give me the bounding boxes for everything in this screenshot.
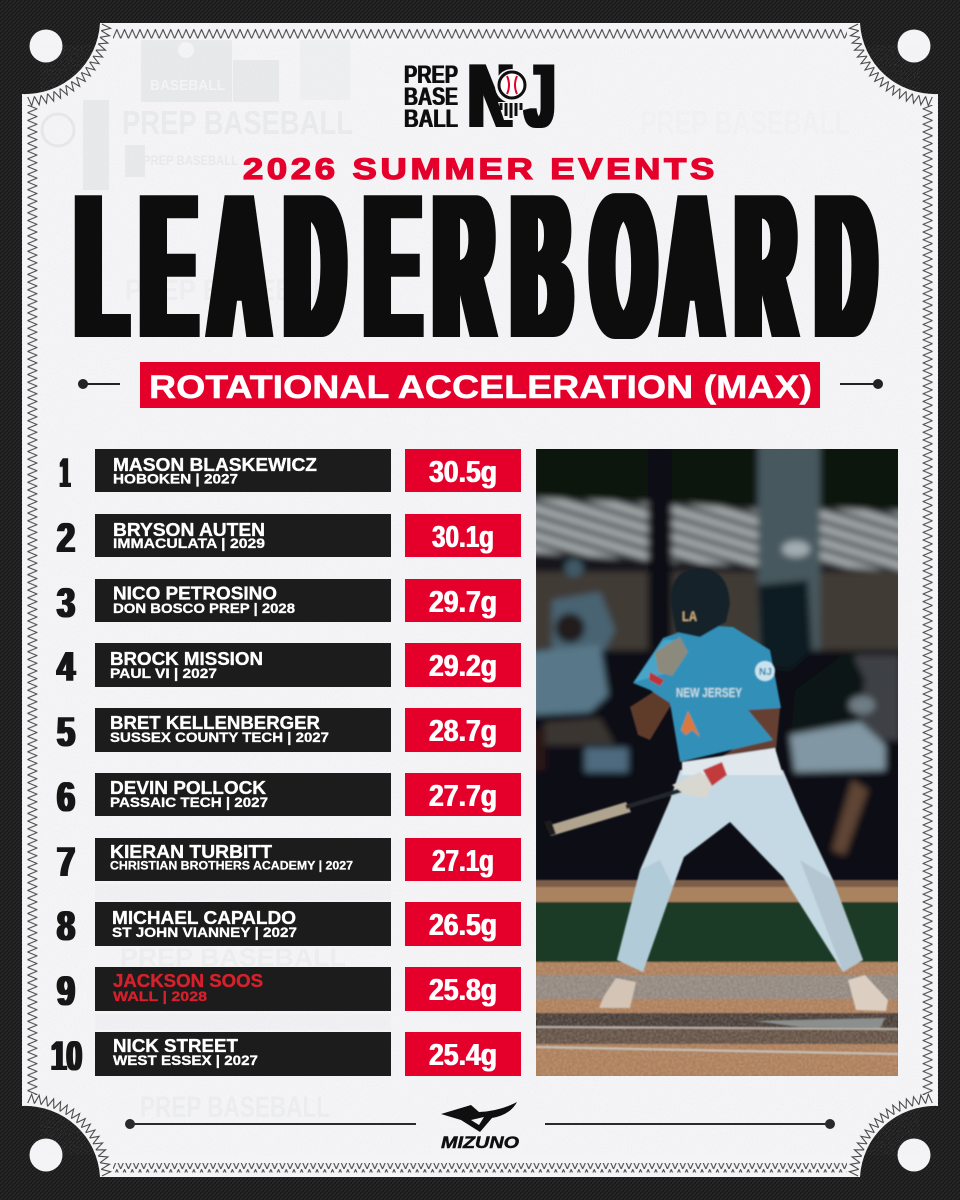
leaderboard rows: [51, 449, 521, 1079]
sponsor logo: Mizuno: [441, 1102, 519, 1152]
jersey lettering: NEW JERSEY: [676, 685, 742, 700]
row 4: BROCK MISSION: [110, 649, 263, 669]
row 8: MICHAEL CAPALDO: [112, 908, 296, 928]
spectators right: [758, 580, 812, 670]
row 10: WEST ESSEX | 2027: [113, 1052, 258, 1068]
footer lines: [126, 1120, 834, 1128]
banner: rotational acceleration: ROTATIONAL ACCELERATION (MAX): [149, 369, 812, 405]
row 6: [57, 773, 521, 820]
banner side ornaments: [78, 380, 882, 388]
row 6: 6: [57, 773, 75, 820]
row 2: IMMACULATA | 2029: [113, 535, 265, 551]
logo baseball and shield: [495, 69, 529, 120]
jersey NJ patch: [755, 661, 775, 681]
logo: Prep Baseball NJ: [404, 46, 555, 147]
row 7: 27.1g: [432, 843, 494, 878]
row 10: NICK STREET: [113, 1036, 238, 1056]
row 6: DEVIN POLLOCK: [110, 778, 266, 798]
row 3: DON BOSCO PREP | 2028: [113, 600, 295, 616]
row 10: 10: [51, 1032, 82, 1079]
row 8: ST JOHN VIANNEY | 2027: [112, 924, 297, 940]
row 9: 25.8g: [429, 972, 497, 1007]
spectators left: [552, 592, 615, 650]
row 9: 9: [57, 967, 75, 1014]
row 5: 28.7g: [429, 713, 497, 748]
jersey NJ patch: NJ: [759, 667, 772, 678]
logo wordmark: BASE: [404, 83, 458, 111]
row 4: 29.2g: [429, 648, 497, 683]
mizuno wordmark: MIZUNO: [441, 1133, 519, 1152]
batter helmet: LA: [682, 608, 697, 624]
row 8: 26.5g: [429, 907, 497, 942]
photo: batter at the plate: [530, 440, 905, 1090]
row 10: [51, 1032, 521, 1079]
batter figure: [544, 568, 888, 1011]
watermark pattern: PREP BASEBALL: [125, 274, 345, 307]
watermark pattern: PREP BASEBALL: [640, 104, 850, 141]
banner: rotational acceleration: [140, 362, 820, 408]
row 4: PAUL VI | 2027: [110, 665, 217, 681]
logo wordmark: [404, 61, 458, 133]
row 6: 27.7g: [429, 778, 497, 813]
batter belt and gloves: [682, 748, 783, 775]
row 7: KIERAN TURBITT: [110, 842, 272, 862]
watermark pattern: PREP BASEBALL: [122, 104, 353, 141]
title: leaderboard: LEADERBOARD: [78, 152, 874, 382]
row 7: 7: [57, 838, 75, 885]
batter jersey: [633, 625, 781, 762]
watermark pattern: PREP BASEBALL: [143, 152, 238, 168]
batter shoes: [599, 978, 636, 1008]
row 3: 29.7g: [429, 584, 497, 619]
row 9: WALL | 2028: [113, 988, 207, 1004]
batter helmet: [670, 568, 730, 637]
runbird mark: [441, 1102, 517, 1132]
row 8: 8: [57, 902, 75, 949]
row 4: 4: [57, 643, 75, 690]
row 3: NICO PETROSINO: [113, 584, 277, 604]
row 8: [57, 902, 521, 949]
row 1: 30.5g: [429, 454, 497, 489]
logo NJ letters: J: [525, 46, 555, 147]
row 5: SUSSEX COUNTY TECH | 2027: [110, 729, 329, 745]
watermark pattern: PREP BASEBALL: [140, 1091, 330, 1124]
row 4: [57, 643, 521, 690]
row 1: [60, 449, 521, 496]
row 5: BRET KELLENBERGER: [110, 713, 320, 733]
subtitle: 2026 summer events: 2026 SUMMER EVENTS: [243, 153, 718, 186]
watermark pattern: PREP BASEBALL: [120, 944, 346, 972]
row 3: [57, 579, 521, 626]
row 6: PASSAIC TECH | 2027: [110, 794, 268, 810]
row 2: 2: [57, 514, 75, 561]
watermark pattern: [42, 40, 850, 1124]
batter bat: [547, 802, 631, 836]
watermark pattern: BASEBALL: [150, 77, 225, 94]
row 7: CHRISTIAN BROTHERS ACADEMY | 2027: [110, 860, 353, 872]
row 5: 5: [57, 708, 75, 755]
row 9: JACKSON SOOS: [113, 971, 263, 991]
row 2: [57, 514, 521, 561]
row 5: [57, 708, 521, 755]
logo wordmark: BALL: [404, 105, 458, 133]
row 1: MASON BLASKEWICZ: [113, 455, 317, 475]
row 2: 30.1g: [432, 519, 494, 554]
logo wordmark: PREP: [404, 61, 458, 89]
logo NJ letters: N: [468, 46, 514, 147]
row 7: [57, 838, 521, 885]
row 10: 25.4g: [429, 1037, 497, 1072]
photo background: [536, 449, 898, 881]
batter arms: [630, 692, 672, 740]
row 1: 1: [60, 449, 70, 496]
row 2: BRYSON AUTEN: [113, 520, 265, 540]
row 1: HOBOKEN | 2027: [113, 470, 238, 486]
batter legs: [617, 770, 863, 972]
photo infield and grass: [530, 880, 905, 1082]
row 3: 3: [57, 579, 75, 626]
row 9: [57, 967, 521, 1014]
